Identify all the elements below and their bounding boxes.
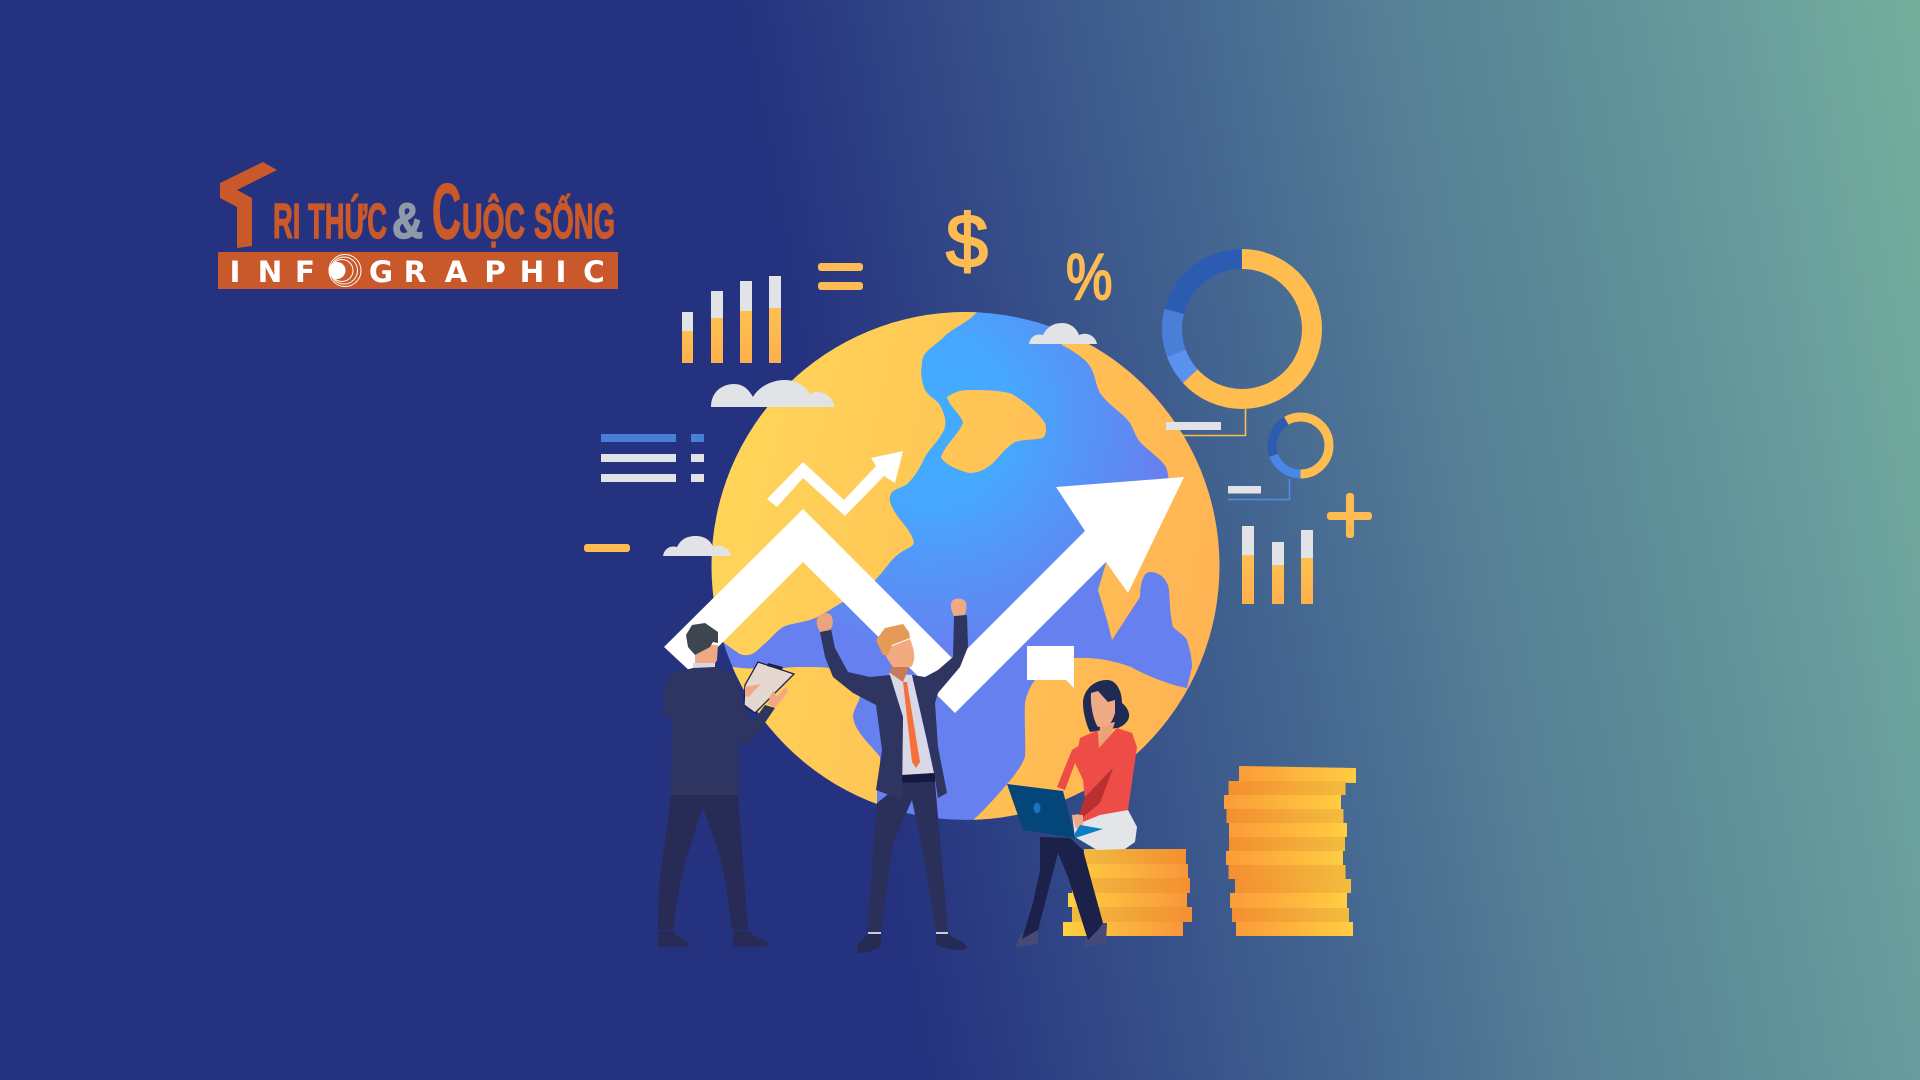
- hair: [1083, 680, 1129, 732]
- left shoe: [658, 931, 689, 947]
- logo: Tri Thức & Cuộc Sống Infographic: [218, 162, 618, 289]
- arm: [732, 680, 775, 747]
- logo large C: C: [432, 167, 461, 255]
- hair: [876, 624, 910, 655]
- right shoe: [936, 934, 967, 950]
- sleeve shade: [1079, 768, 1113, 818]
- island: [941, 390, 1046, 473]
- person: cheering man: [817, 599, 968, 953]
- jacket: [664, 667, 740, 795]
- trouser cuffs: [868, 932, 948, 934]
- logo T mark: [220, 162, 277, 248]
- person: woman with laptop: [1007, 680, 1137, 947]
- logo text: RI THỨC: RI THỨC: [273, 194, 387, 249]
- laptop logo: [1034, 802, 1040, 814]
- bar chart: right: [1242, 526, 1313, 604]
- cloud: upper left: [711, 380, 835, 407]
- donut chart: small: [1272, 417, 1329, 474]
- icon: equals sign: [818, 263, 863, 290]
- trousers: [658, 795, 748, 930]
- logo text: UỘC: UỘC: [462, 194, 525, 249]
- neck: [1099, 722, 1115, 748]
- banner text: GRAPHIC: GRAPHIC: [369, 255, 605, 289]
- coin stack: large: [1224, 766, 1356, 936]
- continent: lower left: [732, 667, 880, 804]
- cloud: top right: [1029, 323, 1097, 344]
- banner emblem: circle O: [328, 254, 361, 286]
- cloud: lower left: [663, 536, 731, 556]
- coin stack: small: [1063, 849, 1192, 936]
- left shoe: [857, 934, 881, 953]
- ocean: [712, 312, 1220, 820]
- jacket left: [820, 629, 903, 800]
- neck: [890, 665, 910, 682]
- logo text: SỐNG: SỐNG: [534, 194, 615, 249]
- trousers: [867, 782, 948, 932]
- right shoe: [733, 931, 768, 947]
- skirt: [1072, 810, 1137, 850]
- logo ampersand: &: [392, 193, 423, 249]
- face: [1091, 691, 1115, 727]
- icon: minus sign: [584, 544, 630, 552]
- globe: [712, 312, 1220, 820]
- shirt: [889, 673, 934, 775]
- callout: small donut label: [1228, 479, 1290, 500]
- fist right: [951, 599, 966, 616]
- callout: large donut label: [1166, 409, 1246, 436]
- legend list: left: [601, 434, 704, 482]
- icon: dollar sign: $: [946, 199, 988, 283]
- bar chart: upper left: [682, 276, 781, 363]
- hand: [768, 687, 788, 708]
- shoes: [1016, 923, 1107, 947]
- hair: [686, 623, 718, 655]
- neck: [695, 645, 718, 667]
- speech bubble: [1027, 646, 1074, 688]
- person: man with clipboard: [658, 623, 794, 947]
- belt: [902, 773, 935, 783]
- banner text: INF: INF: [230, 255, 315, 289]
- tie: [903, 682, 920, 768]
- icon: percent sign: %: [1066, 242, 1112, 313]
- donut chart: large: [1172, 259, 1312, 399]
- face: [885, 639, 914, 667]
- hand: [1072, 815, 1083, 829]
- icon: plus sign: [1327, 493, 1372, 538]
- laptop screen: [1007, 784, 1075, 838]
- large zigzag arrow: [664, 477, 1184, 713]
- blouse: [1075, 728, 1137, 822]
- blouse sleeve: [1057, 745, 1080, 790]
- clipboard: [744, 662, 794, 713]
- collar: [693, 663, 715, 668]
- laptop keyboard: [1075, 825, 1103, 838]
- thumb: [745, 684, 761, 697]
- fist left: [817, 613, 833, 632]
- continent: right: [973, 344, 1220, 820]
- legs: [1022, 837, 1103, 940]
- jacket right: [912, 615, 968, 798]
- logo banner: [218, 252, 618, 289]
- continent: upper left: [712, 312, 977, 656]
- small zigzag arrow: [767, 451, 903, 516]
